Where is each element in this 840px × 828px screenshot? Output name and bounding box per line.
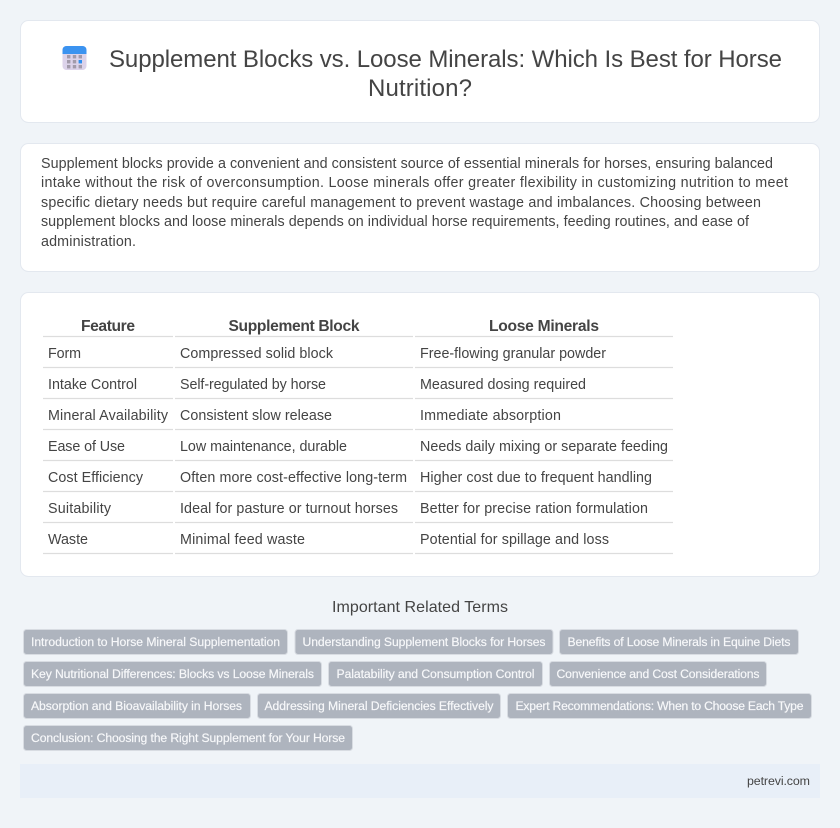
row: intake control: Measured dosing required	[420, 377, 586, 393]
chip	[560, 630, 798, 654]
chip	[24, 630, 288, 654]
chip	[24, 694, 250, 718]
row: suitability: Better for precise ration formulation	[420, 501, 648, 517]
row: ease of use: Low maintenance, durable	[180, 439, 347, 455]
row: suitability: Suitability	[48, 501, 112, 517]
chip: Palatability and Consumption Control	[336, 667, 534, 681]
row: form: Compressed solid block	[180, 346, 334, 362]
text block: summary: Supplement blocks provide a convenient and consistent source of essential minerals for horses, ensuring balanced	[41, 156, 773, 172]
row: suitability	[48, 501, 648, 517]
chip	[328, 662, 542, 686]
panel: header	[20, 20, 820, 122]
row: mineral availability	[48, 408, 561, 424]
chip	[550, 662, 766, 686]
title: Supplement Blocks vs. Loose Minerals: Which Is Best for Horse	[109, 46, 782, 73]
heading: important related terms: Important Related Terms	[332, 599, 508, 616]
row: form: Free-flowing granular powder	[420, 346, 606, 362]
title	[109, 46, 782, 102]
row: form	[48, 346, 606, 362]
row: mineral availability: Mineral Availability	[48, 408, 169, 424]
chip	[24, 662, 322, 686]
table header: Loose Minerals	[489, 318, 599, 335]
row: form: Form	[48, 346, 81, 362]
row: waste: Minimal feed waste	[180, 532, 305, 548]
row: waste	[48, 532, 609, 548]
panel: summary paragraph	[20, 144, 820, 272]
panel: comparison table	[20, 292, 820, 576]
table header: Supplement Block	[228, 318, 360, 335]
row: cost efficiency	[48, 470, 652, 486]
row: intake control: Intake Control	[48, 377, 137, 393]
row: mineral availability: Immediate absorption	[420, 408, 561, 424]
chip: Introduction to Horse Mineral Supplementation	[31, 635, 280, 649]
table header	[81, 318, 599, 335]
title: Nutrition?	[368, 75, 472, 102]
text block: summary: intake without the risk of overconsumption. Loose minerals offer greater flexibility in customizing nutrition to meet	[41, 175, 788, 191]
table header: Feature	[81, 318, 135, 335]
row: ease of use: Needs daily mixing or separate feeding	[420, 439, 668, 455]
chip: Convenience and Cost Considerations	[556, 667, 760, 681]
footer: petrevi.com	[747, 774, 810, 788]
row: ease of use	[48, 439, 668, 455]
text block: summary: specific dietary needs but require careful management to prevent wastage and imbalances. Choosing between	[41, 195, 761, 211]
chip: Benefits of Loose Minerals in Equine Diets	[568, 635, 790, 649]
row: waste: Potential for spillage and loss	[420, 532, 609, 548]
chip	[295, 630, 553, 654]
icon: calendar	[62, 46, 86, 70]
footer	[20, 764, 820, 798]
chip: Key Nutritional Differences: Blocks vs Loose Minerals	[31, 667, 314, 681]
row: cost efficiency: Often more cost-effective long-term	[180, 470, 407, 486]
text block: summary: supplement blocks and loose minerals depends on individual horse requirements, feeding routines, and ease of	[41, 214, 749, 230]
chip	[258, 694, 500, 718]
chip: Understanding Supplement Blocks for Horses	[302, 635, 546, 649]
row: intake control	[48, 377, 586, 393]
row: waste: Waste	[48, 532, 88, 548]
row: cost efficiency: Cost Efficiency	[48, 470, 144, 486]
row: ease of use: Ease of Use	[48, 439, 125, 455]
row: intake control: Self-regulated by horse	[180, 377, 326, 393]
chip: Expert Recommendations: When to Choose Each Type	[516, 699, 804, 713]
chip: Absorption and Bioavailability in Horses	[31, 699, 242, 713]
row: suitability: Ideal for pasture or turnout horses	[180, 501, 398, 517]
related terms chips	[24, 630, 812, 750]
chip	[24, 726, 352, 750]
text block: summary: administration.	[41, 234, 136, 250]
table rules	[43, 336, 673, 554]
row: mineral availability: Consistent slow release	[180, 408, 332, 424]
text block: summary	[41, 156, 788, 250]
chip: Addressing Mineral Deficiencies Effectively	[264, 699, 494, 713]
row: cost efficiency: Higher cost due to frequent handling	[420, 470, 652, 486]
chip	[508, 694, 812, 718]
chip: Conclusion: Choosing the Right Supplement for Your Horse	[31, 731, 345, 745]
